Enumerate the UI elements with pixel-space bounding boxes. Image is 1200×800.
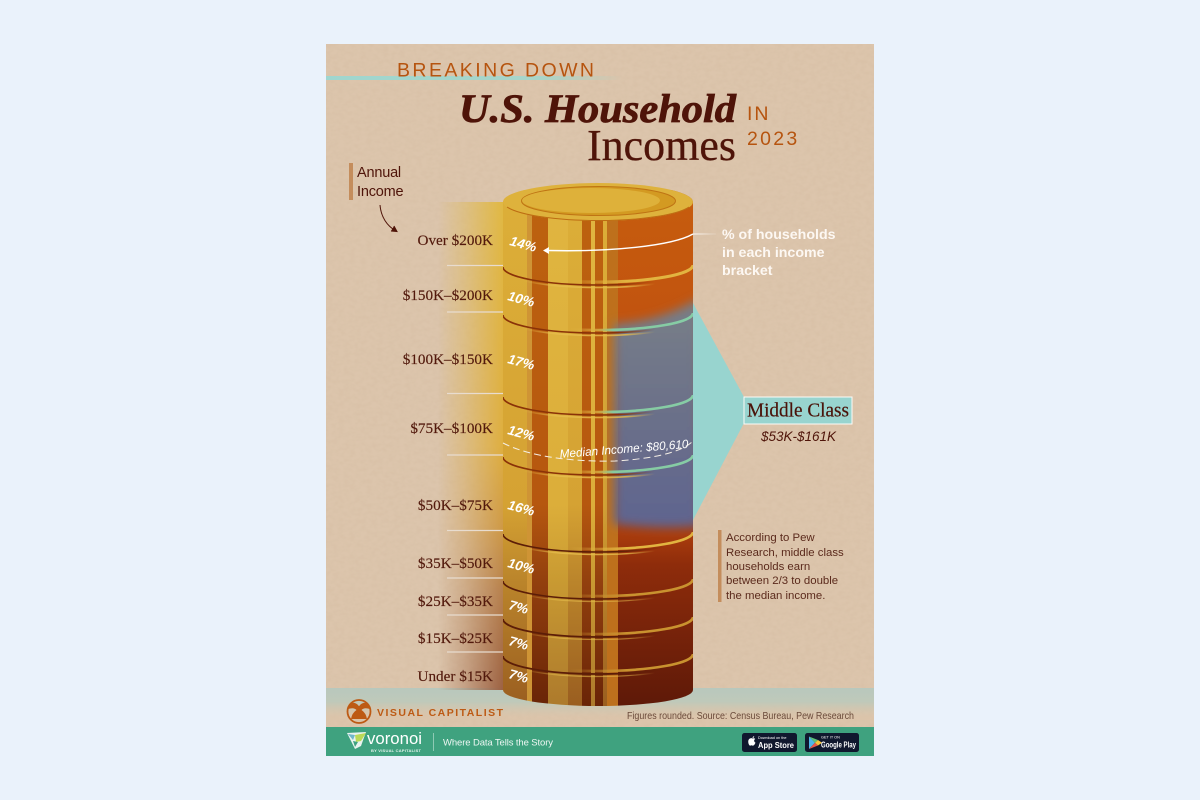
value: 7%: 7%	[507, 666, 530, 686]
annotation: share of households	[722, 227, 836, 279]
chart: stacked income cylinder	[503, 183, 700, 710]
note: Pew Research definition: households earn	[726, 561, 810, 573]
source note: Figures rounded. Source: Census Bureau, Pew Research	[627, 710, 854, 722]
cylinder body stripes	[503, 190, 700, 710]
middle class callout	[693, 303, 852, 520]
voronoi wordmark: voronoi	[367, 729, 422, 748]
coin rim: over $200K / $150K-$200K	[503, 265, 693, 288]
note: Pew Research definition: between 2/3 to double	[726, 575, 838, 587]
coin rim: $100K-$150K / $75K-$100K	[503, 395, 693, 418]
label: under $15K: Under $15K	[418, 668, 493, 685]
note: Pew Research definition: According to Pew	[726, 532, 815, 544]
annotation: share of households: in each income	[722, 245, 825, 261]
badge: Google Play	[805, 733, 859, 752]
title	[397, 60, 800, 170]
annotation: share of households: % of households	[722, 227, 836, 243]
percentage values	[506, 233, 538, 686]
value: 17%: 17%	[506, 351, 536, 373]
label: $150K-$200K: $150K–$200K	[403, 287, 493, 304]
left glow behind income labels	[443, 202, 503, 690]
note: Pew Research definition: the median income.	[726, 590, 825, 602]
value: 10%: 10%	[506, 555, 536, 577]
coin rim: $75K-$100K / $50K-$75K	[503, 455, 693, 478]
value: 7%: 7%	[507, 633, 530, 653]
callout range: $53K-$161K	[760, 429, 837, 444]
title kicker: BREAKING DOWN	[397, 60, 594, 82]
label: $25K-$35K: $25K–$35K	[418, 593, 493, 610]
label: over $200K: Over $200K	[418, 232, 493, 249]
callout title: Middle Class	[747, 400, 849, 422]
note: Pew Research definition	[718, 530, 844, 602]
label: $15K-$25K: $15K–$25K	[418, 630, 493, 647]
arrow: share of households	[543, 234, 716, 254]
teal accent line	[326, 76, 622, 80]
callout pointer	[693, 303, 744, 520]
title line: Incomes: Incomes	[587, 121, 736, 170]
annual income legend	[349, 163, 403, 200]
title: 2023: 2023	[747, 128, 800, 150]
middle class blue overlay	[614, 298, 700, 528]
panel: paper card	[326, 44, 874, 756]
icon: mustache mark	[348, 700, 370, 723]
income bracket labels	[403, 232, 493, 685]
bracket separator lines	[447, 266, 503, 652]
arrow: annual income to labels	[380, 205, 397, 232]
label: $35K-$50K: $35K–$50K	[418, 555, 493, 572]
annual income legend: Income	[357, 184, 403, 200]
annual income legend: Annual	[357, 165, 401, 181]
coin rim: $150K-$200K / $100K-$150K	[503, 313, 693, 336]
cylinder top face	[503, 183, 693, 221]
title line: U.S. Household: U.S. Household	[459, 86, 737, 131]
coin rim: $50K-$75K / $35K-$50K	[503, 532, 693, 554]
value: 12%: 12%	[506, 422, 536, 444]
title: in: IN	[747, 103, 770, 125]
label: $100K-$150K: $100K–$150K	[403, 351, 493, 368]
value: 7%: 7%	[507, 597, 530, 617]
wordmark: VISUAL CAPITALIST	[377, 707, 504, 719]
coin rim: $25K-$35K / $15K-$25K	[503, 617, 693, 640]
coin rim: $35K-$50K / $25K-$35K	[503, 579, 693, 602]
annotation: share of households: bracket	[722, 263, 773, 279]
icon: voronoi mark	[347, 732, 366, 749]
median income marker: Median Income: $80,610	[559, 437, 689, 461]
note: Pew Research definition: Research, middle class	[726, 547, 844, 559]
coin rim: $15K-$25K / under $15K	[503, 654, 693, 676]
value: 14%: 14%	[508, 233, 538, 255]
voronoi byline: BY VISUAL CAPITALIST	[371, 748, 422, 753]
divider	[433, 733, 434, 751]
badge: App Store	[742, 733, 797, 752]
badge: Google Play: Google Play	[821, 740, 857, 750]
value: 10%: 10%	[506, 288, 536, 310]
median income marker	[503, 437, 692, 461]
value: 16%: 16%	[506, 497, 536, 519]
label: $50K-$75K: $50K–$75K	[418, 497, 493, 514]
footer bar	[326, 727, 874, 756]
label: $75K-$100K: $75K–$100K	[410, 420, 493, 437]
badge: App Store: Download on the	[758, 736, 786, 740]
tagline: Where Data Tells the Story	[443, 738, 553, 748]
logo: Visual Capitalist	[348, 700, 504, 723]
callout box	[744, 397, 852, 424]
badge: Google Play: GET IT ON	[821, 736, 840, 740]
badge: App Store: App Store	[758, 740, 794, 750]
footer tinted band	[326, 688, 874, 727]
